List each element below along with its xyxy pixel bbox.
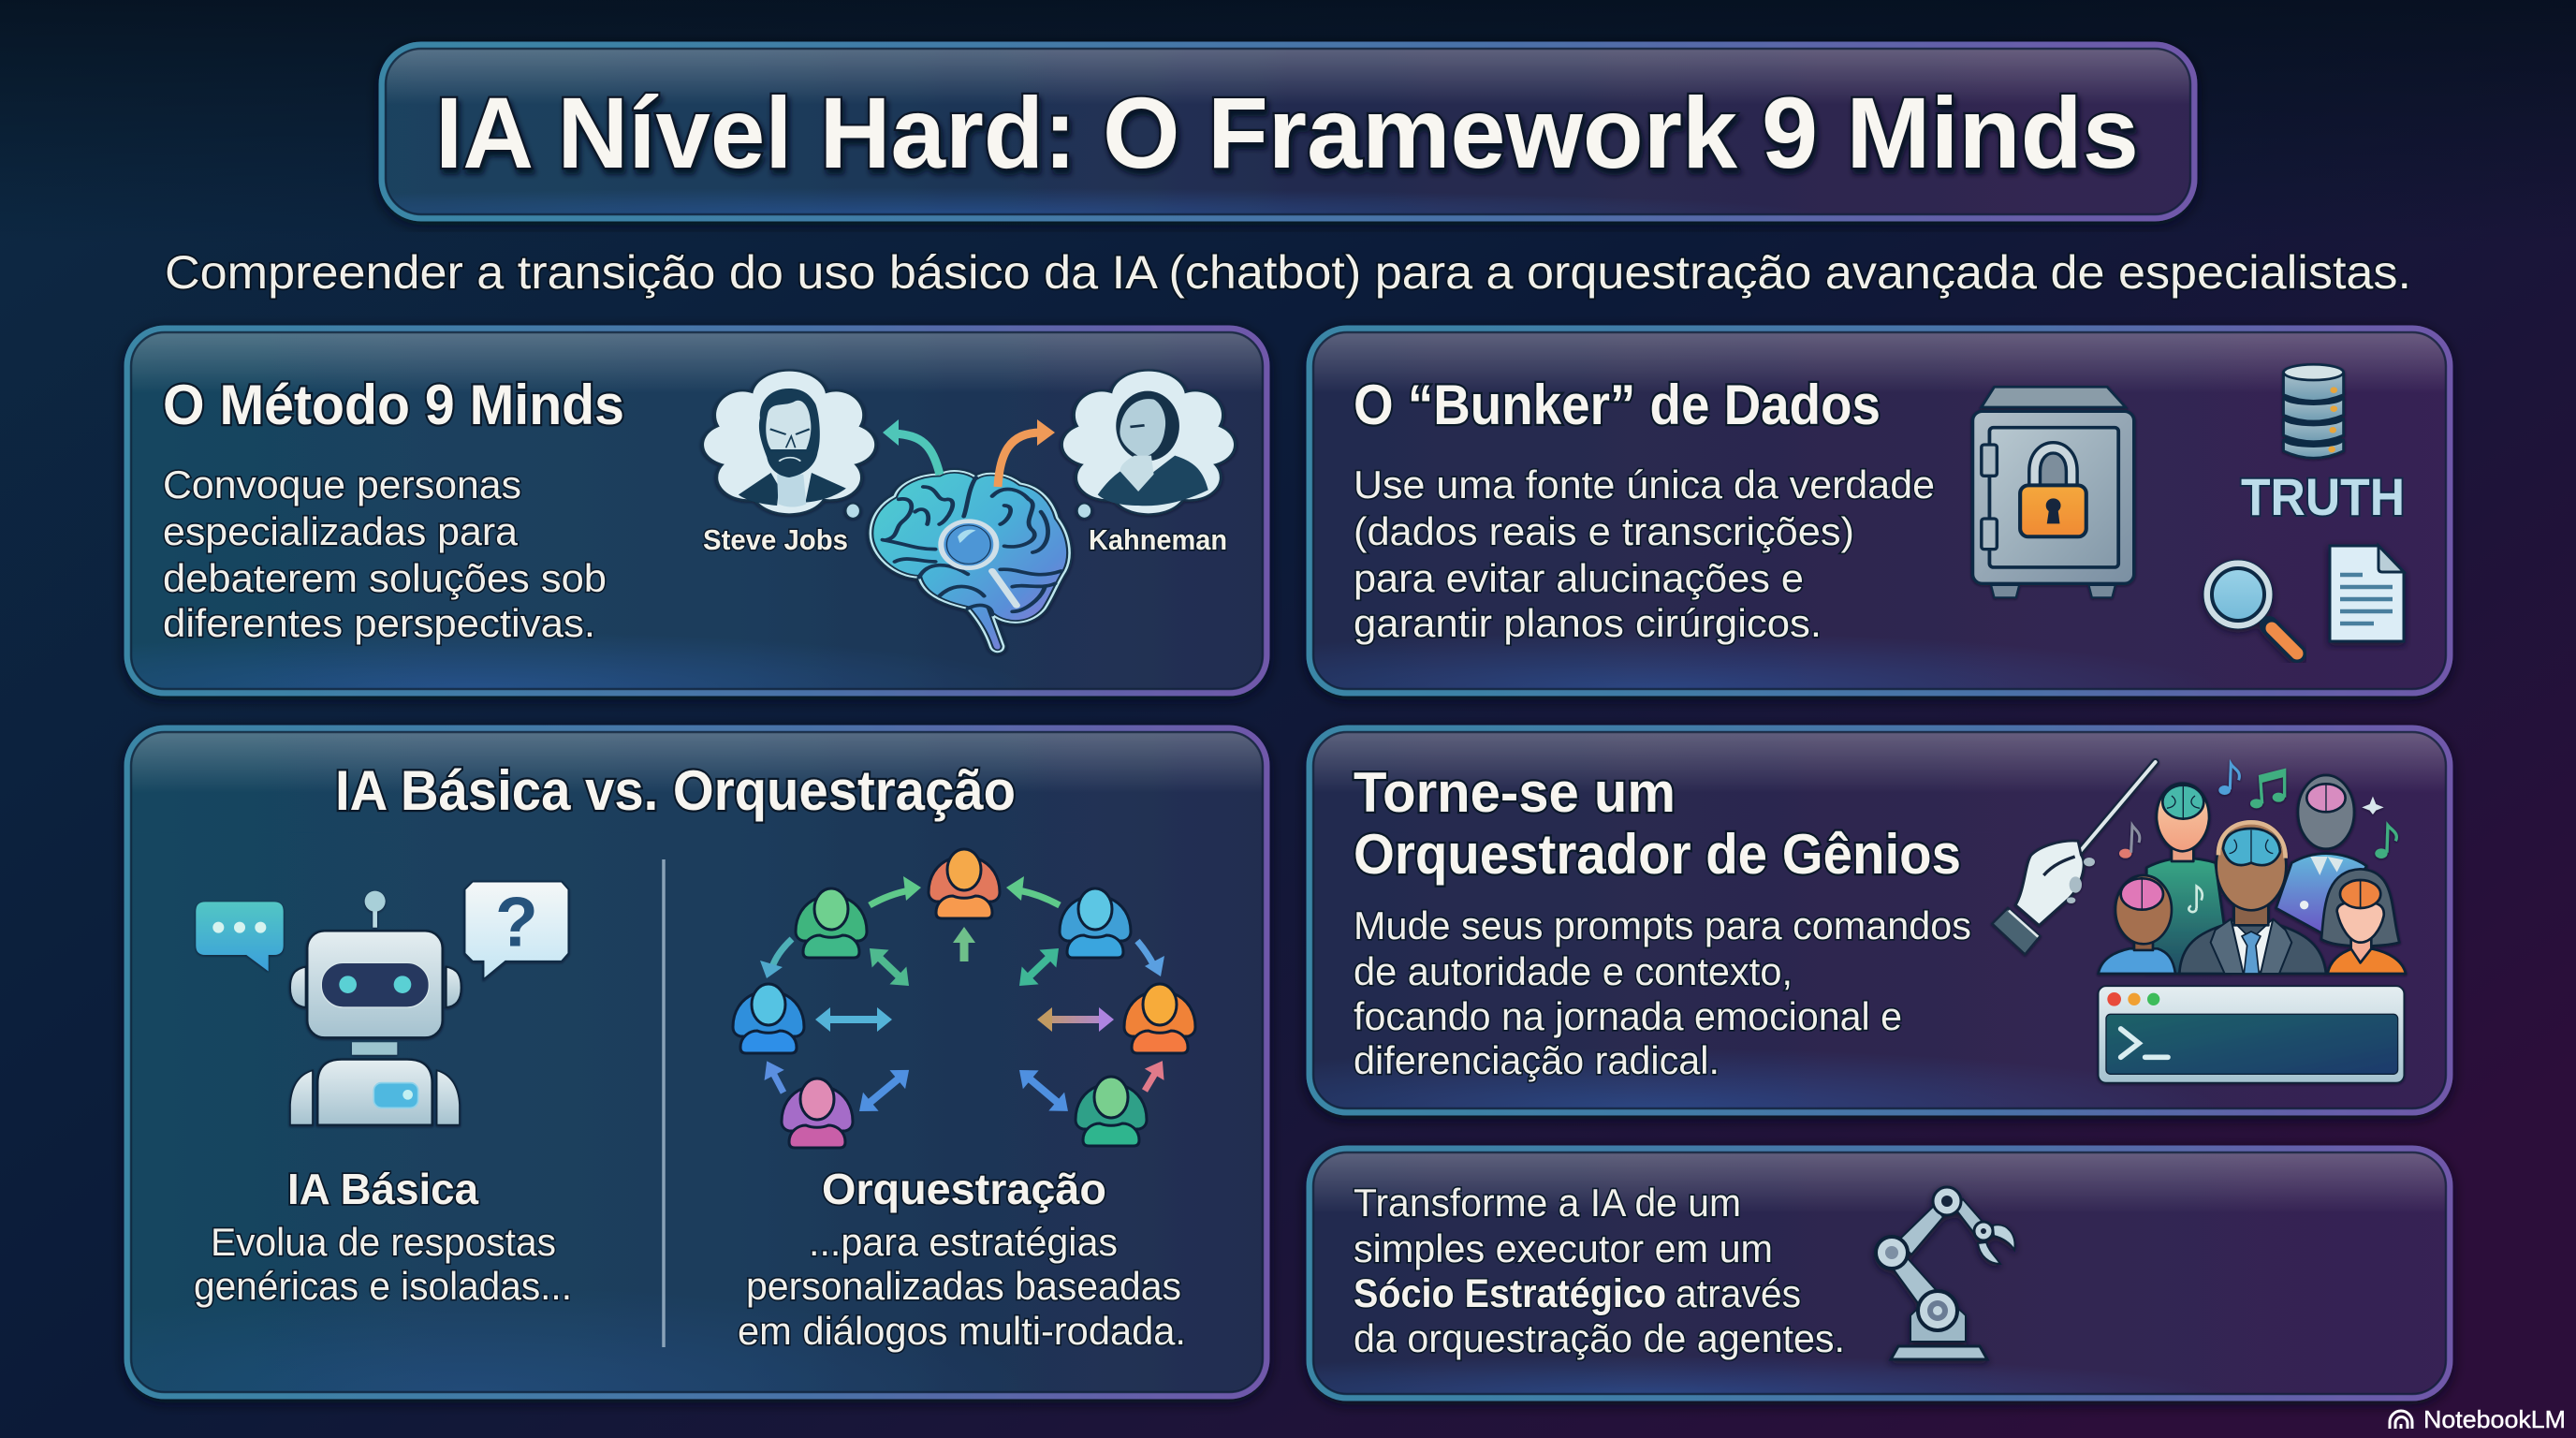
icon: conductor hand, genius team, terminal xyxy=(1992,762,2406,1083)
hand xyxy=(2015,841,2084,925)
icon: robot with speech bubbles: ? xyxy=(495,883,538,961)
panel: O Método 9 Minds xyxy=(127,329,1266,693)
body text: Transforme a IA de um xyxy=(1354,1181,1741,1225)
title text xyxy=(435,76,2139,189)
title text: 9 Minds xyxy=(1762,76,2139,189)
front-right genius xyxy=(2321,869,2406,974)
body text: garantir planos cirúrgicos. xyxy=(1354,601,1822,645)
body text: para evitar alucinações e xyxy=(1354,556,1804,600)
back-left genius xyxy=(2146,784,2231,974)
arrows between agents xyxy=(757,876,1172,1121)
person: blue left xyxy=(733,984,804,1053)
Orquestração column text: ...para estratégias xyxy=(809,1220,1118,1264)
body text xyxy=(1354,462,1935,645)
terminal window xyxy=(2099,986,2404,1083)
body text: através xyxy=(1676,1271,1801,1315)
front-left genius xyxy=(2099,875,2175,974)
body text: especializadas para xyxy=(163,509,519,553)
heading: O “Bunker” de Dados xyxy=(1354,374,1881,436)
body text: (dados reais e transcrições) xyxy=(1354,509,1854,553)
IA Básica column text: IA Básica xyxy=(287,1165,478,1213)
person: top orange xyxy=(929,849,1000,918)
front-center genius xyxy=(2179,822,2326,974)
chat bubble xyxy=(196,902,284,971)
icon: magnifying glass xyxy=(2204,561,2297,653)
person: purple xyxy=(782,1078,853,1148)
label: Steve Jobs: Steve Jobs xyxy=(703,523,848,556)
Orquestração column text xyxy=(738,1165,1186,1353)
icon: Kahneman thought bubble xyxy=(1063,372,1234,519)
IA Básica column text: Evolua de respostas xyxy=(211,1220,556,1264)
arrow: orange to Kahneman xyxy=(998,419,1055,487)
icon: robot arm xyxy=(1876,1187,2015,1359)
body text: diferentes perspectivas. xyxy=(163,601,595,645)
Orquestração column text: em diálogos multi-rodada. xyxy=(738,1309,1186,1353)
watermark: NotebookLM: NotebookLM xyxy=(2423,1405,2566,1433)
person: green right xyxy=(1076,1077,1147,1146)
Orquestração column text: Orquestração xyxy=(822,1165,1106,1213)
body text: da orquestração de agentes. xyxy=(1354,1316,1845,1360)
body text: focando na jornada emocional e xyxy=(1354,994,1902,1038)
heading: Torne-se um xyxy=(1354,761,1676,824)
panel: IA Básica vs. Orquestração xyxy=(127,728,1266,1396)
body text xyxy=(1354,1181,1845,1360)
body text: Use uma fonte única da verdade xyxy=(1354,462,1935,506)
body text: diferenciação radical. xyxy=(1354,1038,1720,1082)
heading: O Método 9 Minds xyxy=(163,374,624,436)
Orquestração column text: personalizadas baseadas xyxy=(746,1264,1181,1308)
icon: database xyxy=(2284,364,2344,458)
antenna xyxy=(369,910,382,928)
arrow: teal to Steve Jobs xyxy=(883,419,940,475)
IA Básica column text xyxy=(194,1165,572,1308)
title banner xyxy=(382,45,2194,218)
body text: Mude seus prompts para comandos xyxy=(1354,903,1971,947)
body text: simples executor em um xyxy=(1354,1226,1773,1270)
music notes xyxy=(2119,764,2396,858)
person: green xyxy=(796,888,867,958)
heading: IA Básica vs. Orquestração xyxy=(335,759,1016,822)
icon: brain with magnifier xyxy=(871,471,1070,652)
label: Kahneman: Kahneman xyxy=(1089,523,1227,556)
body text: Sócio Estratégico xyxy=(1354,1271,1666,1316)
icon: orchestrated agents network xyxy=(733,849,1195,1148)
title text: O Framework xyxy=(1103,76,1738,189)
ears xyxy=(290,967,306,1007)
icon: document xyxy=(2330,546,2404,641)
title text: IA Nível Hard: xyxy=(435,76,1076,189)
body text xyxy=(163,462,607,645)
body text: de autoridade e contexto, xyxy=(1354,949,1793,993)
icon: robot with speech bubbles xyxy=(196,882,568,1125)
back-right genius xyxy=(2276,775,2366,934)
body text: Convoque personas xyxy=(163,462,521,506)
panel: O Bunker de Dados xyxy=(1310,329,2450,693)
neck xyxy=(352,1042,397,1055)
icon: Steve Jobs thought bubble xyxy=(704,372,874,519)
panel: Torne-se um Orquestrador de Gênios xyxy=(1310,728,2450,1112)
torso xyxy=(317,1060,432,1125)
baton xyxy=(2080,762,2156,852)
heading: Orquestrador de Gênios xyxy=(1354,823,1961,886)
IA Básica column text: genéricas e isoladas... xyxy=(194,1264,572,1308)
heading xyxy=(1354,761,1961,886)
body text xyxy=(1354,903,1971,1082)
person: blue right xyxy=(1060,888,1131,958)
question bubble xyxy=(465,882,568,979)
subtitle: Compreender a transição do uso básico da IA (chatbot) para a orquestração avançada de especialistas. xyxy=(165,246,2411,299)
person: orange right xyxy=(1124,984,1195,1053)
label: TRUTH: TRUTH xyxy=(2241,467,2405,526)
body text: debaterem soluções sob xyxy=(163,556,607,600)
panel: Sócio Estratégico xyxy=(1310,1149,2450,1398)
icon: safe with padlock xyxy=(1973,387,2134,597)
head xyxy=(307,931,443,1037)
